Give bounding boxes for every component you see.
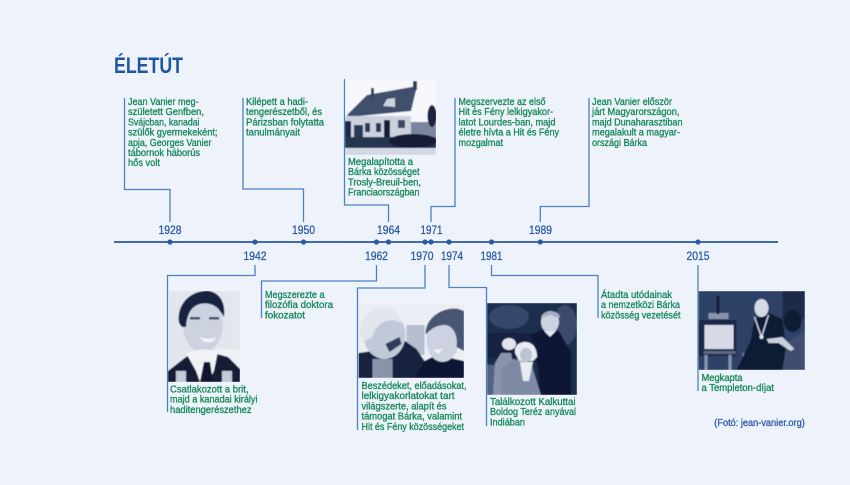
title: ÉLETÚT <box>114 53 183 78</box>
event: 1950: tanulmányait <box>246 128 300 139</box>
year labels: 1928 <box>158 223 182 237</box>
event: 1989: járt Magyarországon, <box>591 107 680 118</box>
event: 1989: majd Dunaharasztiban <box>592 117 682 128</box>
year labels: 2015 <box>686 249 710 263</box>
photo: young man in uniform <box>168 291 240 382</box>
event: 1970: világszerte, alapít és <box>362 401 447 412</box>
event: 2015: a Templeton-díjat <box>702 383 774 394</box>
event: 1928: született Genfben, <box>128 107 204 118</box>
event: 2015: Megkapta <box>702 373 743 384</box>
photo credit: (Fotó: jean-vanier.org) <box>714 418 805 429</box>
event: 1964 <box>344 79 437 222</box>
event: 1970 <box>358 265 466 433</box>
event: 1928: Svájcban, kanadai <box>128 117 200 128</box>
event: 1981: közösség vezetését <box>601 310 681 321</box>
photo: house <box>345 79 436 155</box>
event: 1989: megalakult a magyar- <box>592 128 680 139</box>
event: 1971: Megszervezte az első <box>458 97 546 108</box>
event: 1950: tengerészetből, és <box>246 107 322 118</box>
year labels: 1942 <box>244 249 267 263</box>
event: 1974: Indiában <box>490 417 525 428</box>
event: 1981: a nemzetközi Bárka <box>601 300 680 311</box>
year labels: 1989 <box>529 223 552 237</box>
event: 1950: Párizsban folytatta <box>246 117 324 128</box>
event: 1964: Megalapította a <box>348 157 413 168</box>
event: 1974: Találkozott Kalkuttai <box>490 397 576 408</box>
event: 1962: filozófia doktora <box>265 300 333 311</box>
event: 1974: Boldog Teréz anyával <box>490 407 576 418</box>
event: 1928: hős volt <box>128 158 160 169</box>
event: 1989: Jean Vanier először <box>592 97 673 108</box>
event: 1942: Csatlakozott a brit, <box>170 384 248 396</box>
year labels: 1974 <box>441 249 463 263</box>
event: 1970: Beszédeket, előadásokat, <box>362 381 466 392</box>
year labels: 1971 <box>420 223 443 237</box>
event: 1928: Jean Vanier meg- <box>128 97 198 108</box>
event: 1971: mozgalmat <box>458 138 503 149</box>
event: 1964: Bárka közösséget <box>348 167 420 178</box>
event: 1962 <box>262 265 376 321</box>
event: 1981 <box>492 265 681 321</box>
event: 1964: Trosly-Breuil-ben, <box>348 177 421 188</box>
year labels: 1981 <box>480 249 503 263</box>
event: 1928 <box>124 97 218 222</box>
event: 1971: Hit és Fény lelkigyakor- <box>458 107 553 118</box>
event: 1928: apja, Georges Vanier <box>128 138 212 149</box>
event: 1962: Megszerezte a <box>265 290 325 301</box>
photo: Templeton prize <box>698 291 805 370</box>
timeline axis <box>114 239 778 245</box>
year labels: 1970 <box>410 249 434 263</box>
year labels: 1962 <box>365 249 388 263</box>
event: 1974 <box>449 265 577 428</box>
event: 1928: tábornok háborús <box>128 148 200 159</box>
event: 1970: Hit és Fény közösségeket <box>362 422 464 433</box>
event: 1942 <box>168 265 258 416</box>
event: 1989: országi Bárka <box>592 138 647 149</box>
year labels: 1964 <box>377 223 400 237</box>
event: 1950: Kilépett a hadi- <box>246 97 308 108</box>
event: 1942: haditengerészethez <box>170 405 252 416</box>
event: 1989 <box>540 97 682 222</box>
event: 1971: latot Lourdes-ban, majd <box>458 117 556 128</box>
year labels: 1950 <box>292 223 315 237</box>
event: 2015 <box>698 265 805 394</box>
event: 1970: támogat Bárka, valamint <box>362 412 462 423</box>
event: 1971: életre hívta a Hit és Fény <box>458 128 559 139</box>
event: 1971 <box>431 97 559 222</box>
photo: meeting with Mother Teresa <box>487 303 577 395</box>
event: 1928: szülők gyermekeként; <box>128 128 218 139</box>
event: 1962: fokozatot <box>265 310 305 321</box>
event: 1981: Átadta utódainak <box>601 290 672 301</box>
event: 1942: majd a kanadai királyi <box>170 395 258 406</box>
event: 1970: lelkigyakorlatokat tart <box>362 391 455 402</box>
year labels <box>158 223 710 263</box>
event: 1964: Franciaországban <box>348 188 420 199</box>
event: 1950 <box>243 97 324 222</box>
photo: two people smiling <box>358 308 464 378</box>
